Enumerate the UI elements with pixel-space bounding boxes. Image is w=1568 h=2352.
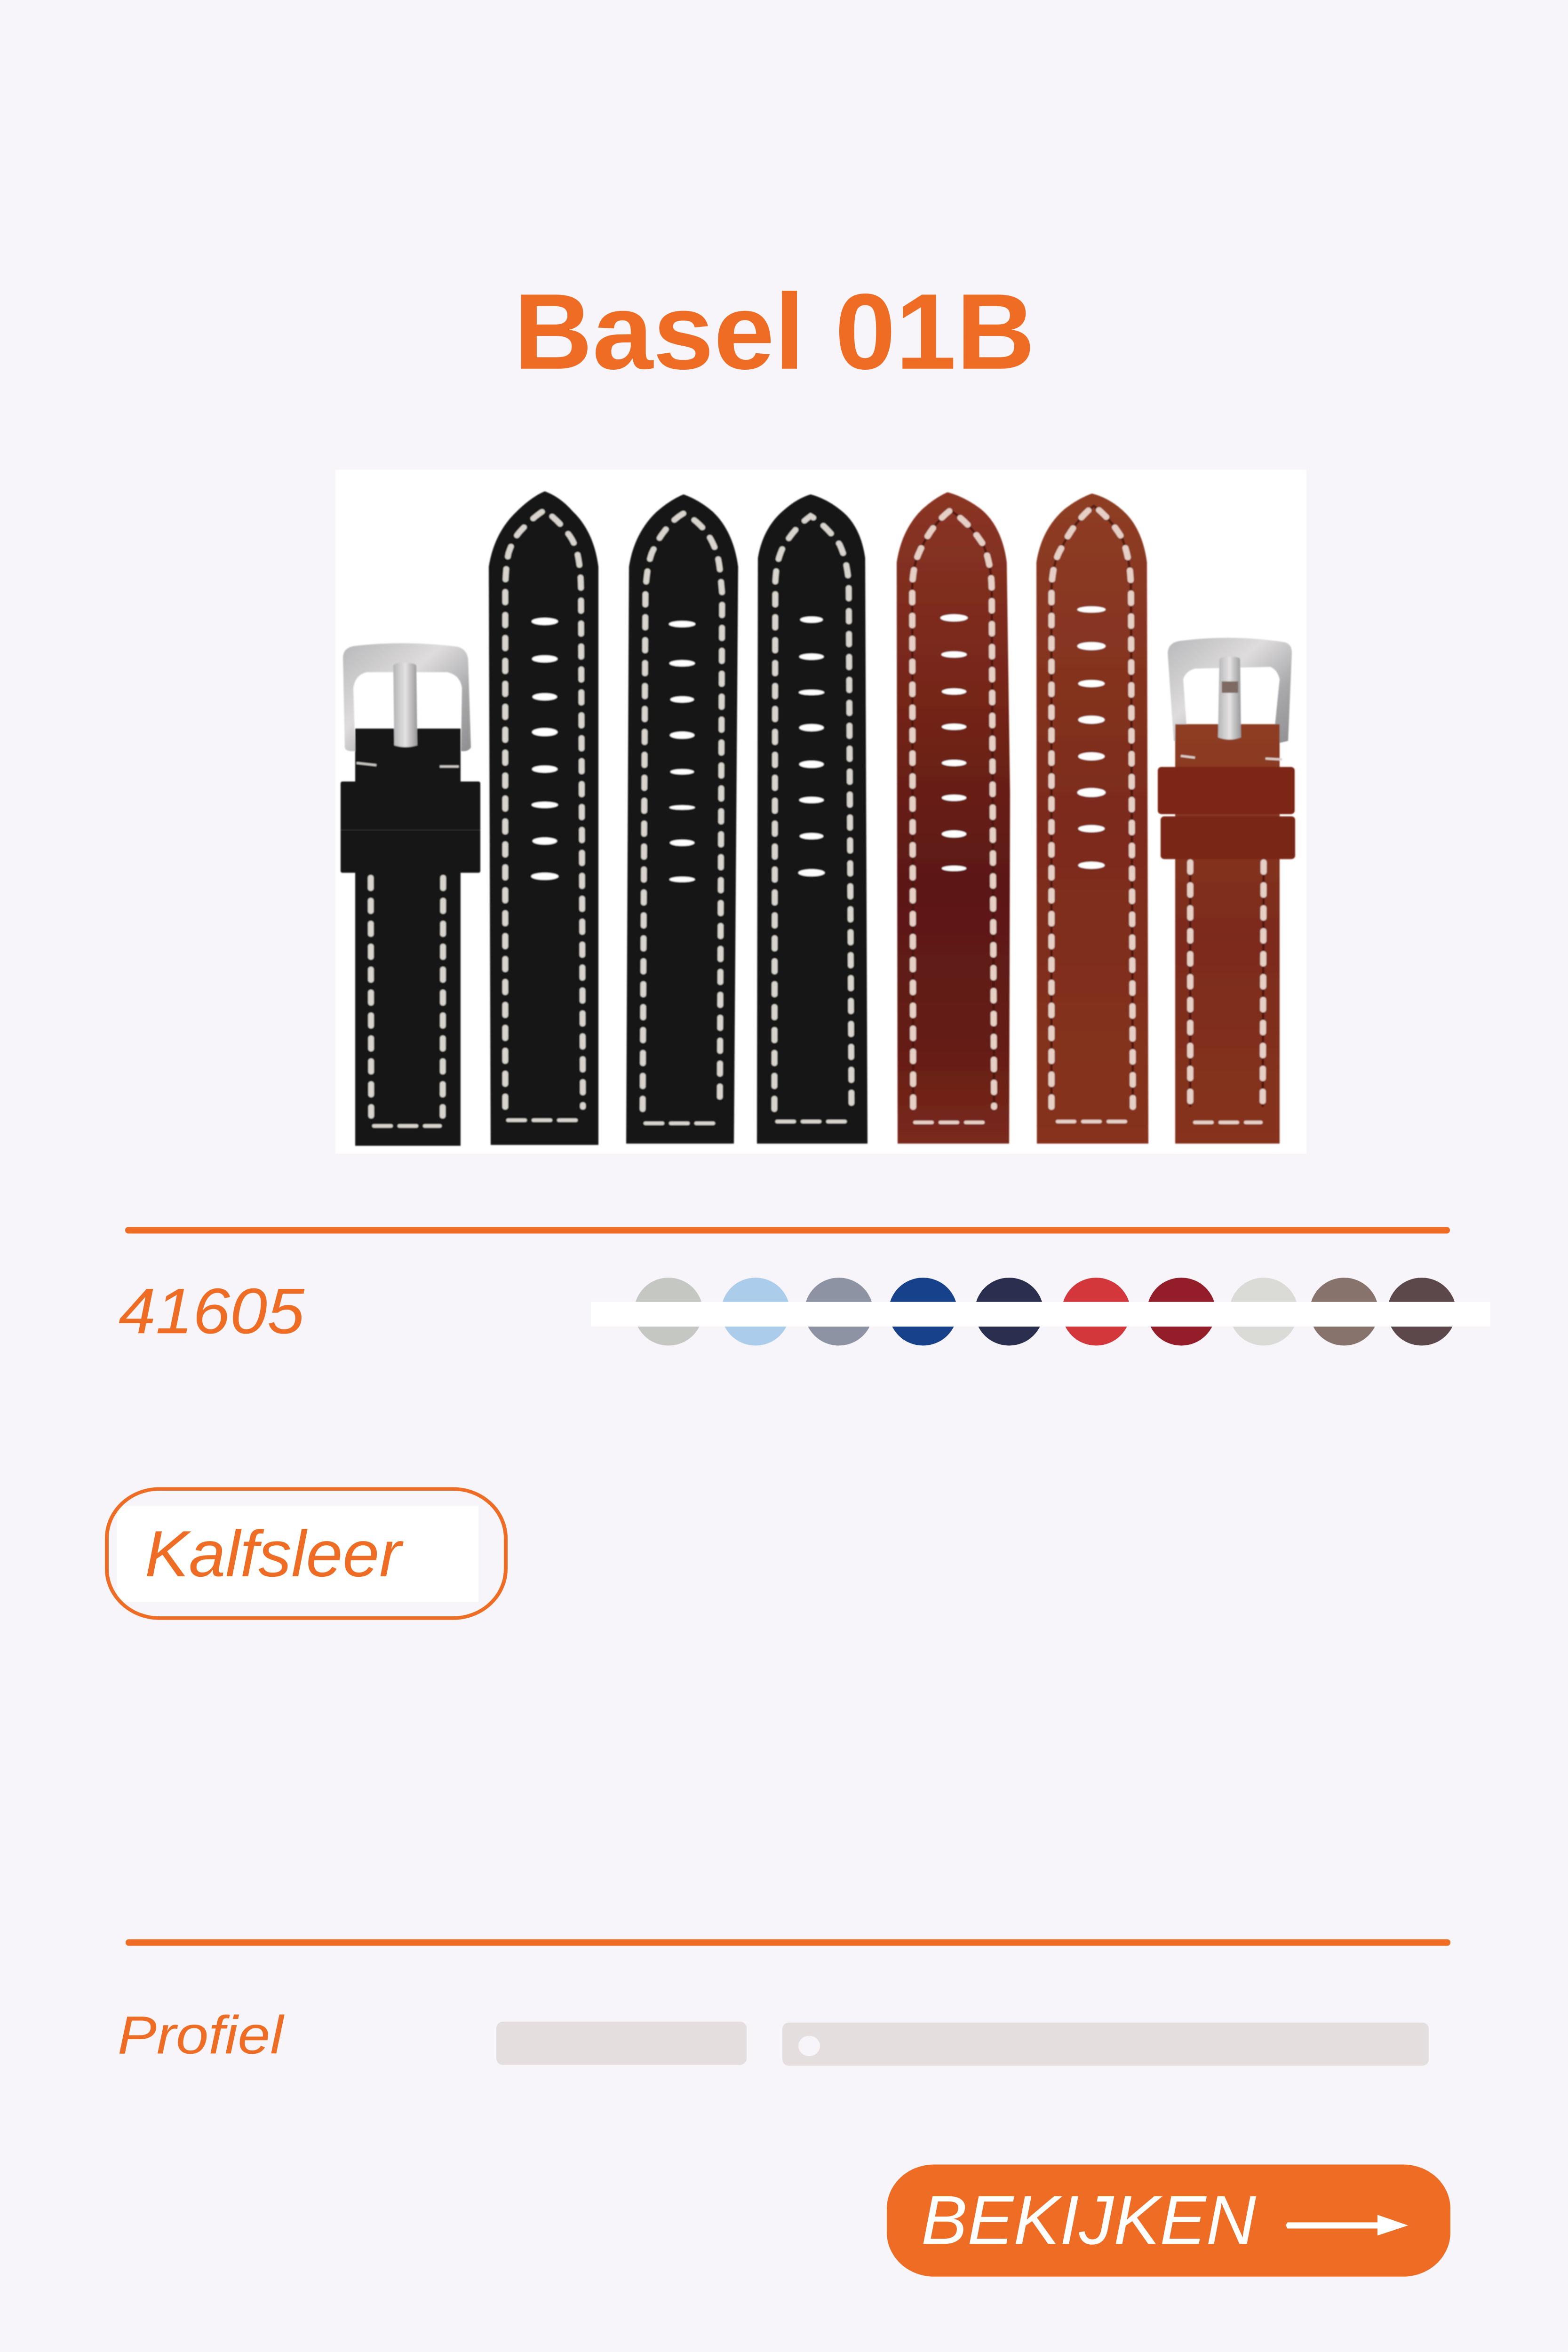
- divider: upper rule: [125, 1227, 1450, 1233]
- title: Basel 01B: [514, 272, 1035, 392]
- strap 6: brown long: [1036, 493, 1148, 1144]
- strap 5: brown long: [897, 492, 1010, 1144]
- button: bekijken: [887, 2165, 1450, 2277]
- strap 3: black long: [626, 494, 738, 1144]
- product photo: watch straps: [335, 469, 1306, 1154]
- article number: 41605: [119, 1275, 305, 1347]
- profile bar: right with marker: [782, 2023, 1429, 2066]
- strap 7: brown with buckle: [1158, 638, 1295, 1144]
- strap 1: black with buckle: [341, 643, 480, 1146]
- profile label: Profiel: [118, 2005, 285, 2065]
- divider: lower rule: [126, 1939, 1450, 1946]
- material badge: Kalfsleer: [145, 1518, 404, 1590]
- strap 2: black long: [489, 491, 598, 1145]
- profile bar: left: [496, 2022, 747, 2065]
- button: bekijken: BEKIJKEN: [921, 2182, 1256, 2259]
- icon: arrow: [1286, 2215, 1408, 2235]
- colour swatches: [591, 1278, 1490, 1345]
- material badge: [107, 1489, 506, 1618]
- strap 4: black long: [757, 494, 868, 1144]
